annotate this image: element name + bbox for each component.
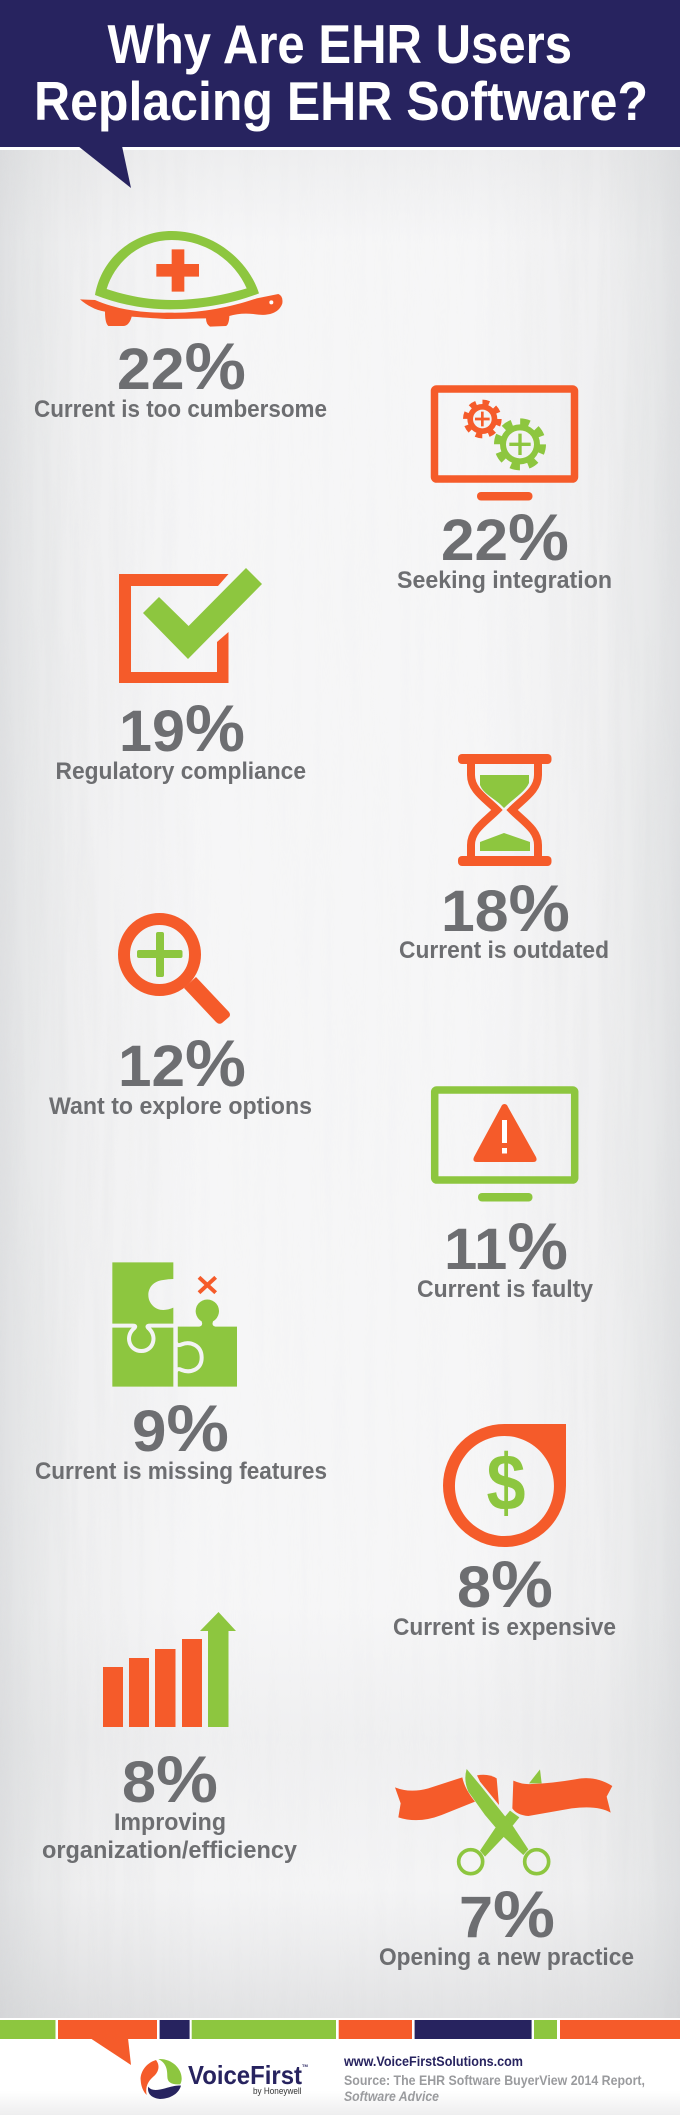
icon: monitor with warning	[435, 1090, 575, 1202]
icon: hourglass	[458, 754, 552, 866]
title	[34, 13, 648, 132]
label: Seeking integration	[397, 567, 612, 594]
website link: www.VoiceFirstSolutions.com	[343, 2053, 523, 2069]
stat: 22% seeking integration	[397, 389, 612, 594]
label: Opening a new practice	[379, 1944, 634, 1971]
percentage: 11%	[444, 1209, 568, 1283]
label: Current is outdated	[399, 937, 609, 964]
label: Regulatory compliance	[56, 758, 306, 785]
percentage: 22%	[117, 329, 246, 403]
icon: magnifying glass	[124, 919, 230, 1024]
source: Source: The EHR Software BuyerView 2014 Report,	[344, 2072, 645, 2088]
icon: puzzle with missing piece	[110, 1262, 237, 1388]
label: organization/efficiency	[42, 1837, 298, 1864]
percentage: 9%	[132, 1391, 229, 1465]
logo: TM	[302, 2063, 308, 2068]
icon: monitor with gears	[434, 389, 574, 500]
stat: 8% improving organization/efficiency	[42, 1612, 298, 1864]
stat: 12% want to explore options	[49, 919, 312, 1120]
stat: 11% current is faulty	[417, 1090, 594, 1303]
label: Current is missing features	[35, 1458, 327, 1485]
percentage: 8%	[122, 1742, 218, 1816]
icon: check box	[119, 568, 262, 683]
logo: by Honeywell	[253, 2086, 302, 2096]
stat: 22% current is too cumbersome	[34, 231, 327, 423]
percentage: 12%	[118, 1026, 246, 1100]
label: Improving	[114, 1809, 226, 1836]
logo: VoiceFirst	[188, 2060, 302, 2090]
label: Current is too cumbersome	[34, 396, 327, 423]
source: Software Advice	[344, 2088, 439, 2104]
icon: turtle	[80, 231, 282, 327]
stat: 19% regulatory compliance	[56, 568, 306, 785]
label	[42, 1809, 298, 1864]
percentage: 18%	[441, 871, 570, 945]
icon: dollar drop: $	[486, 1438, 526, 1527]
footer	[0, 2018, 680, 2115]
label: Want to explore options	[49, 1093, 312, 1120]
source	[344, 2072, 645, 2104]
label: Current is expensive	[393, 1614, 616, 1641]
icon: dollar drop	[443, 1424, 566, 1547]
speech bubble tail	[90, 2038, 131, 2065]
percentage: 8%	[457, 1547, 553, 1621]
percentage: 7%	[459, 1877, 555, 1951]
speech bubble tail	[78, 146, 131, 188]
label: Current is faulty	[417, 1276, 594, 1303]
title: Why Are EHR Users	[108, 13, 572, 75]
percentage: 22%	[441, 500, 569, 574]
stat: 18% current is outdated	[399, 754, 609, 964]
title banner	[0, 0, 680, 188]
stat: 9% current is missing features	[35, 1262, 327, 1485]
percentage: 19%	[119, 691, 245, 765]
stat: 7% opening a new practice	[379, 1769, 634, 1971]
stat: 8% current is expensive	[393, 1424, 616, 1641]
icon: scissors cutting ribbon	[395, 1769, 612, 1874]
icon: rising bars with arrow	[103, 1612, 236, 1727]
logo	[141, 2059, 308, 2099]
coloured stripe	[0, 2020, 680, 2039]
